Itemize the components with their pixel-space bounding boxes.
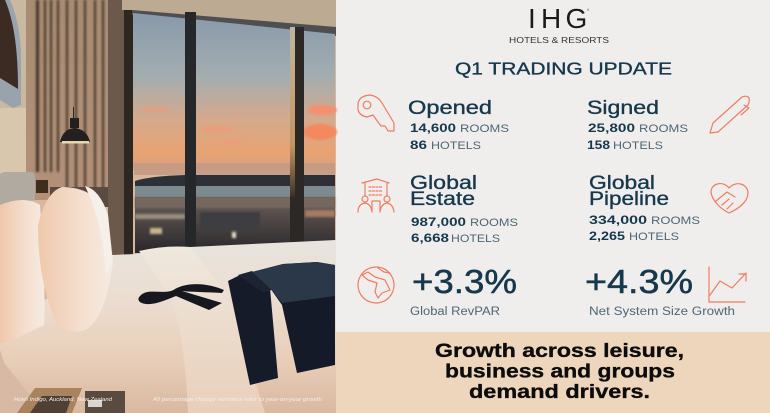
stat: global estate: Estate — [410, 189, 475, 210]
hotel room photo — [0, 0, 337, 413]
right panel background — [336, 0, 770, 413]
stat: net system size growth — [585, 263, 735, 318]
icon: key — [358, 95, 394, 131]
stat: opened: ROOMS — [460, 123, 509, 135]
stat: signed: ROOMS — [639, 123, 688, 135]
stat: global estate: HOTELS — [451, 233, 500, 245]
callout band: business and groups — [445, 360, 675, 382]
icon: heart handshake — [711, 184, 748, 213]
stat: global pipeline: Pipeline — [589, 189, 669, 210]
callout band: Growth across leisure, — [435, 340, 684, 362]
icon: pen — [710, 96, 749, 133]
stat: opened: Opened — [408, 98, 492, 119]
stat: global estate: Global — [410, 173, 477, 194]
stat: global revpar: Global RevPAR — [410, 306, 500, 318]
stat: net system size growth: Net System Size Growth — [589, 306, 735, 318]
stat: signed: HOTELS — [613, 140, 663, 152]
photo caption: Hotel Indigo, Auckland, New Zealand — [14, 397, 113, 403]
IHG logo — [509, 3, 609, 45]
stat: opened — [408, 98, 509, 152]
stat: signed — [587, 98, 688, 152]
stat: global revpar — [410, 263, 517, 318]
stat: global pipeline: Global — [589, 173, 655, 194]
callout band — [336, 332, 770, 413]
stat: signed: 158 — [587, 140, 611, 152]
stat: global pipeline: ROOMS — [651, 215, 700, 227]
stat: opened: HOTELS — [431, 140, 481, 152]
stat: net system size growth: +4.3% — [585, 263, 693, 300]
stat: signed: 25,800 — [588, 123, 635, 135]
stat: global pipeline — [589, 173, 700, 243]
stat: global pipeline: 334,000 — [589, 215, 647, 227]
stat: global estate: 6,668 — [411, 233, 450, 245]
IHG logo: ® — [587, 8, 590, 12]
icon: growth chart — [709, 267, 746, 302]
stat: global estate — [410, 173, 518, 245]
icon: hotel and people — [358, 179, 394, 212]
title: Q1 TRADING UPDATE — [455, 58, 672, 78]
IHG logo: HOTELS & RESORTS — [509, 35, 609, 45]
stat: opened: 86 — [410, 140, 427, 152]
IHG logo: IHG — [528, 3, 587, 34]
photo footnote: All percentage change numbers refer to year-on-year growth — [152, 397, 322, 403]
stat: global estate: 987,000 — [411, 217, 466, 229]
stat: opened: 14,600 — [410, 123, 456, 135]
stat: global pipeline: HOTELS — [629, 231, 679, 243]
stat: global revpar: +3.3% — [412, 263, 517, 300]
stat: global estate: ROOMS — [470, 217, 518, 229]
stat: global pipeline: 2,265 — [589, 231, 626, 243]
icon: globe — [358, 267, 394, 303]
stat: signed: Signed — [587, 98, 659, 119]
callout band: demand drivers. — [469, 381, 650, 403]
